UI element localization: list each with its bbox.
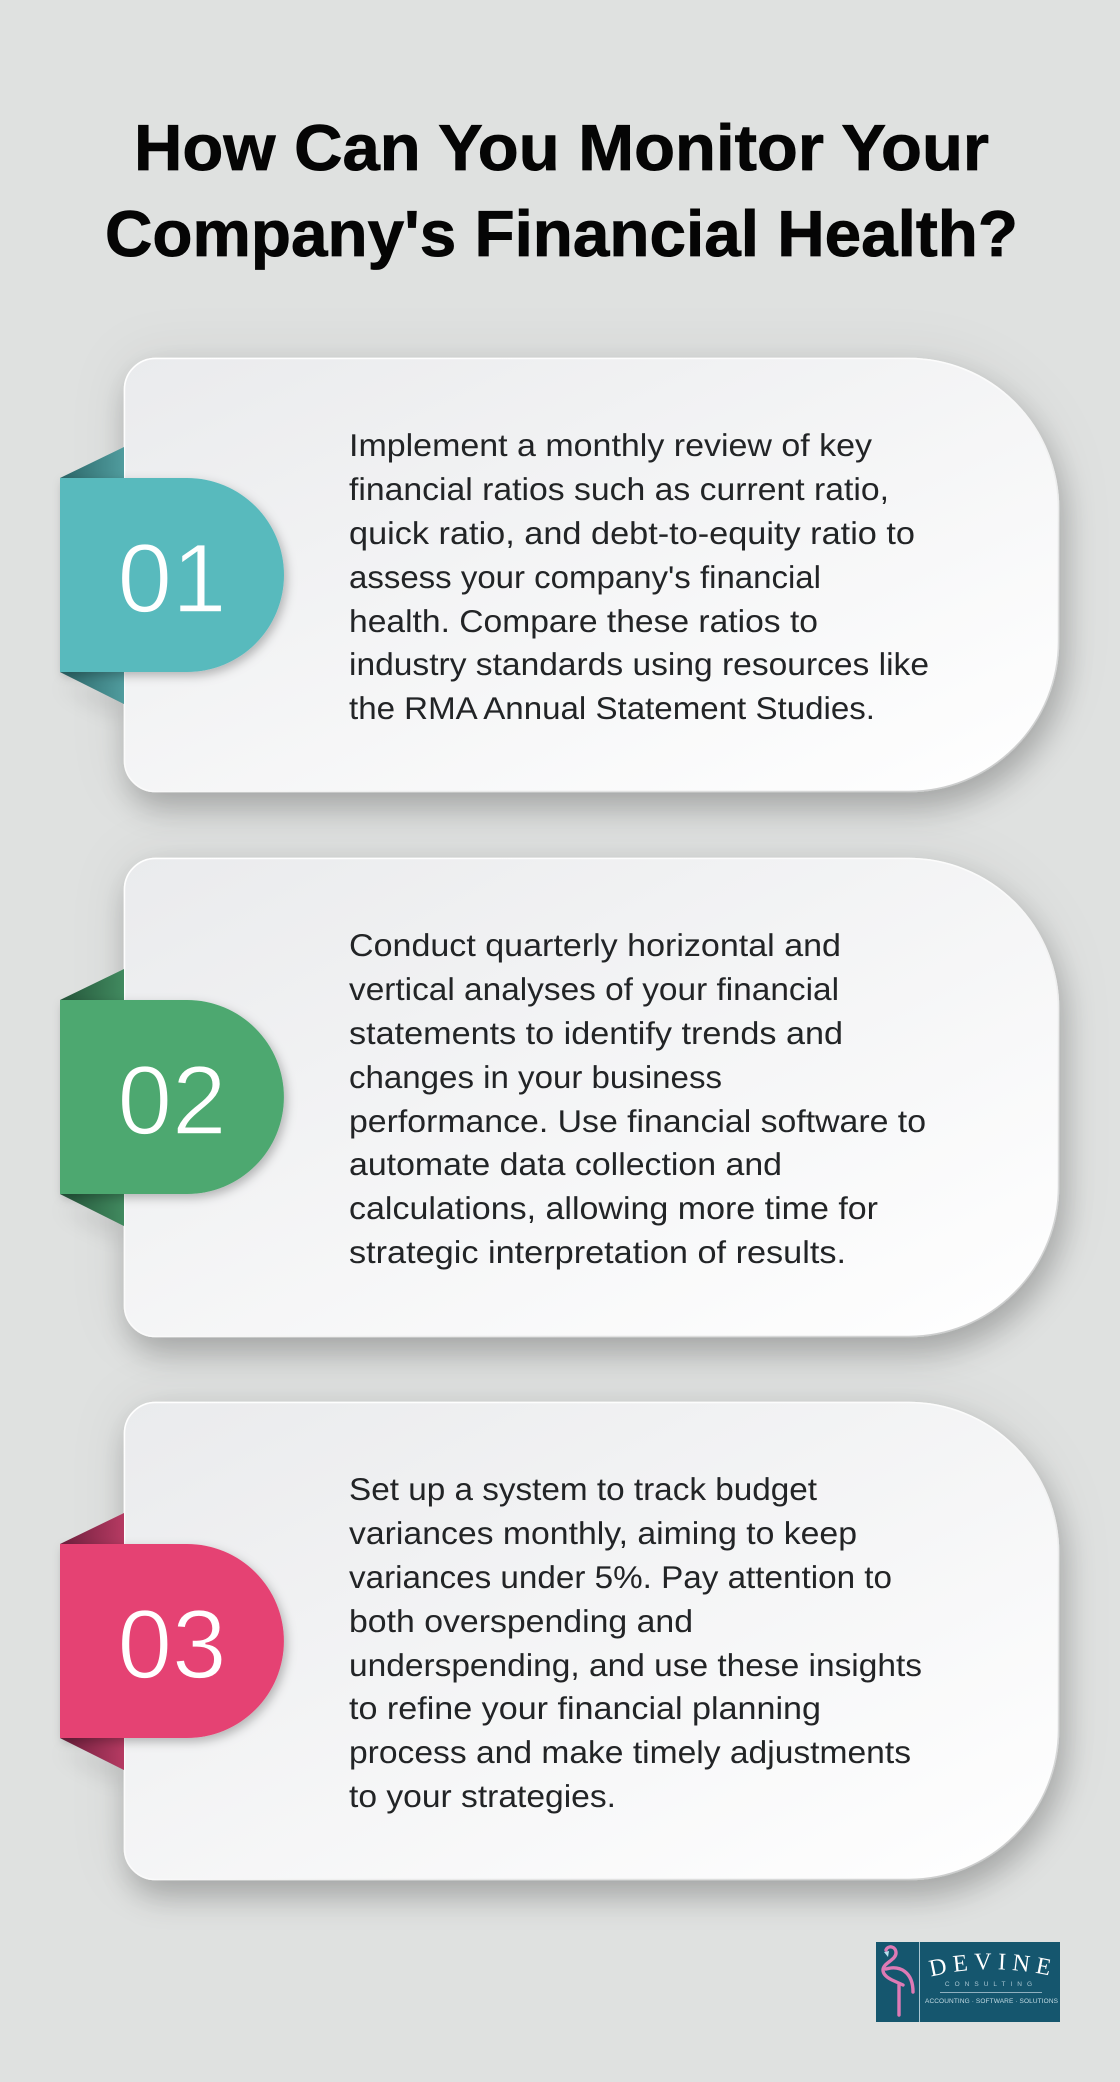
step 1 text: health. Compare these ratios to [349,603,818,639]
logo: Devine Consulting [876,1942,1060,2022]
step 2 text [349,927,926,1270]
panel: step 2 [60,858,1058,1337]
step 1 text: quick ratio, and debt-to-equity ratio to [349,515,915,551]
step 1 text: assess your company's financial [349,559,821,595]
fold shadow [60,1194,124,1226]
title: How Can You Monitor Your [134,111,989,184]
card background [124,358,1058,792]
number tab [60,1513,284,1770]
number tab: 01 [117,523,227,633]
step 2 text: strategic interpretation of results. [349,1234,846,1270]
step 2 text: calculations, allowing more time for [349,1190,878,1226]
panel: step 3 [60,1402,1058,1880]
card background [124,858,1058,1337]
step 1 text: financial ratios such as current ratio, [349,471,889,507]
step 1 text: industry standards using resources like [349,646,929,682]
logo subtitle: CONSULTING [945,1981,1037,1988]
step 3 text: Set up a system to track budget [349,1471,817,1507]
icon: flamingo [883,1947,913,2015]
number tab: 03 [117,1589,227,1699]
step 1 text [349,427,929,726]
step 2 text: changes in your business [349,1059,722,1095]
logo wordmark: DEVINE [928,1954,1050,1976]
step 2 text: statements to identify trends and [349,1015,843,1051]
number tab [60,969,284,1226]
panel: step 1 [60,358,1058,792]
step 3 text: variances under 5%. Pay attention to [349,1559,892,1595]
title [105,111,1018,270]
step 3 text: both overspending and [349,1603,693,1639]
step 3 text: process and make timely adjustments [349,1734,911,1770]
title: Company's Financial Health? [105,197,1018,270]
step 2 text: vertical analyses of your financial [349,971,839,1007]
step 2 text: performance. Use financial software to [349,1103,926,1139]
number tab: 02 [117,1045,227,1155]
step 1 text: Implement a monthly review of key [349,427,872,463]
step 3 text [349,1471,922,1814]
step 1 text: the RMA Annual Statement Studies. [349,690,875,726]
number tab [60,447,284,704]
step 3 text: variances monthly, aiming to keep [349,1515,857,1551]
step 3 text: to your strategies. [349,1778,616,1814]
fold shadow [60,672,124,704]
card background [124,1402,1058,1880]
step 2 text: Conduct quarterly horizontal and [349,927,841,963]
logo tagline: ACCOUNTING · SOFTWARE · SOLUTIONS [925,1998,1059,2005]
fold shadow [60,1738,124,1770]
step 2 text: automate data collection and [349,1146,782,1182]
step 3 text: to refine your financial planning [349,1690,821,1726]
step 3 text: underspending, and use these insights [349,1647,922,1683]
